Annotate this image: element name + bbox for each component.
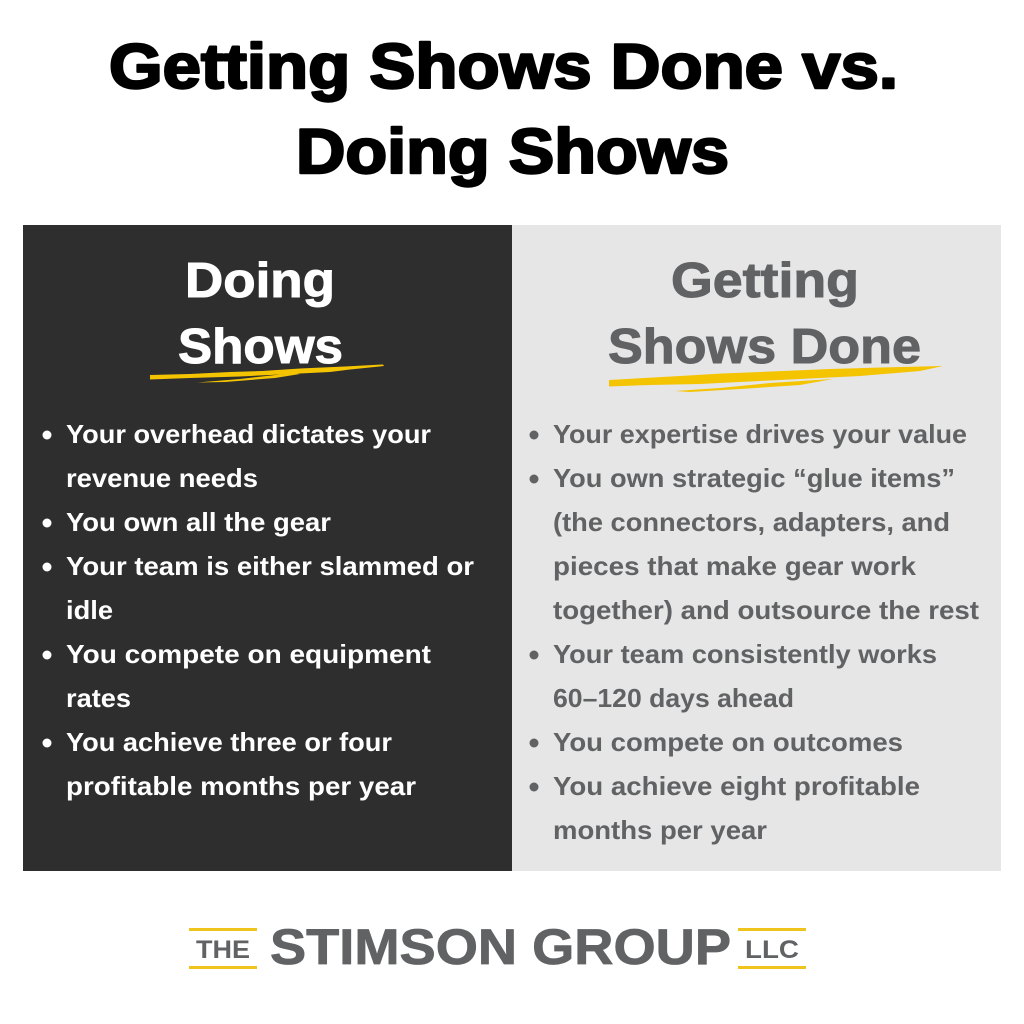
bullet list: getting shows done: You compete on outcomes	[553, 727, 903, 757]
bullet list: getting shows done: together) and outsource the rest	[553, 595, 979, 625]
bullet list: getting shows done: (the connectors, adapters, and	[553, 507, 950, 537]
bullet list: doing shows: idle	[66, 595, 113, 625]
heading: getting shows done: Shows Done	[608, 320, 921, 374]
brush underline: getting shows done	[609, 366, 943, 392]
title: Getting Shows Done vs.	[109, 32, 898, 102]
bullet list: doing shows	[42, 419, 474, 801]
bullet list: doing shows: Your overhead dictates your	[66, 419, 431, 449]
heading: doing shows: Shows	[178, 320, 343, 374]
bullet list: doing shows: revenue needs	[66, 463, 258, 493]
bullet list: getting shows done: Your expertise drives your value	[553, 419, 967, 449]
bullet list: doing shows: Your team is either slammed or	[66, 551, 474, 581]
brush underline: doing shows	[150, 364, 384, 382]
bullet list: doing shows: profitable months per year	[66, 771, 416, 801]
panel: getting shows done	[512, 225, 1001, 871]
bullet list: getting shows done: 60–120 days ahead	[553, 683, 794, 713]
title	[109, 32, 898, 187]
heading: doing shows: Doing	[185, 254, 335, 308]
bullet list: doing shows: You own all the gear	[66, 507, 331, 537]
bullet list: getting shows done: You achieve eight profitable	[553, 771, 920, 801]
bullet list: doing shows: You compete on equipment	[66, 639, 431, 669]
logo	[189, 919, 806, 975]
bullet list: getting shows done: months per year	[553, 815, 767, 845]
bullet list: doing shows: rates	[66, 683, 131, 713]
logo: LLC	[745, 936, 799, 964]
logo: STIMSON GROUP	[270, 919, 731, 975]
bullet list: getting shows done: Your team consistently works	[553, 639, 937, 669]
title: Doing Shows	[296, 117, 729, 187]
bullet list: getting shows done: You own strategic “glue items”	[553, 463, 955, 493]
bullet list: getting shows done	[530, 419, 979, 845]
panel: doing shows	[23, 225, 512, 871]
heading: getting shows done: Getting	[671, 254, 859, 308]
heading: doing shows	[178, 254, 343, 374]
bullet list: doing shows: You achieve three or four	[66, 727, 392, 757]
bullet list: getting shows done: pieces that make gear work	[553, 551, 917, 581]
logo: THE	[196, 936, 250, 964]
heading: getting shows done	[608, 254, 921, 374]
